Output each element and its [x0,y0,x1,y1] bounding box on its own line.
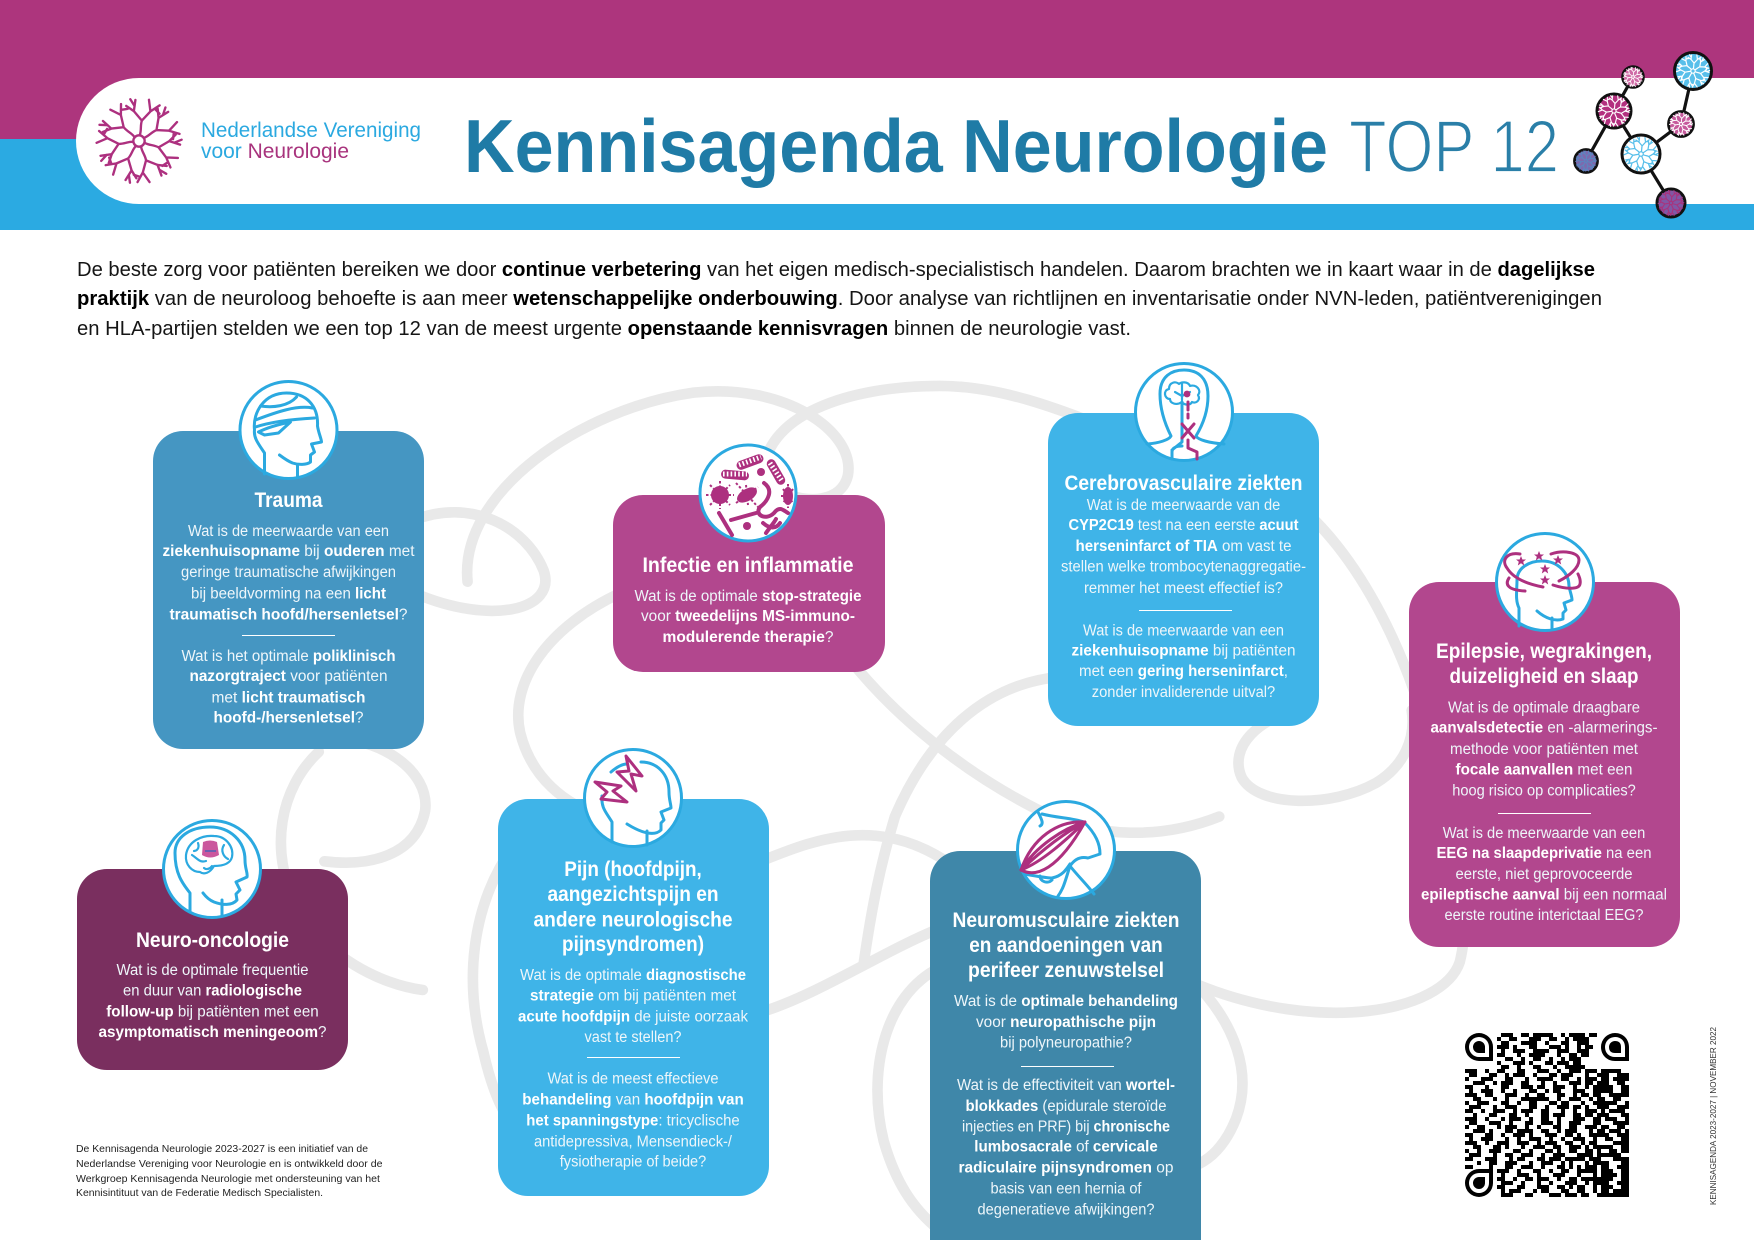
panel: Infectie en inflammatie [613,445,885,672]
question 2: radiculaire pijnsyndromen op [958,1160,1174,1176]
question 1: Wat is de meerwaarde van een [188,523,389,540]
question 2: fysiotherapie of beide? [560,1154,707,1170]
heading: pijnsyndromen) [562,933,704,956]
question 2: het spanningstype: tricyclische [526,1112,740,1130]
question 2 [522,1070,744,1170]
heading: Pijn (hoofdpijn, [564,858,702,881]
footnote text: Kennisintituut van de Federatie Medisch Specialisten. [76,1188,323,1199]
background squiggle line [281,386,1465,1230]
logo: NVN [95,97,421,186]
question 1: ziekenhuisopname bij ouderen met [162,543,415,560]
question 1: geringe traumatische afwijkingen [181,564,396,581]
header background: cyan band [0,139,1754,230]
question 2: blokkades (epidurale steroïde [966,1098,1166,1115]
question 1 [1430,700,1658,800]
title: TOP 12 [1349,105,1559,188]
question 1: vast te stellen? [584,1029,682,1046]
question 2 [182,648,396,726]
question 1: acute hoofdpijn de juiste oorzaak [518,1008,748,1026]
question: modulerende therapie? [662,629,834,646]
heading: Neuromusculaire ziekten [952,909,1180,932]
title: Kennisagenda Neurologie [464,104,1328,188]
footnote text: De Kennisagenda Neurologie 2023-2027 is een initiatief van de [76,1144,368,1155]
heading: en aandoeningen van [969,934,1163,957]
question 2 [957,1077,1175,1218]
logo text [201,119,421,163]
question 1: bij beeldvorming na een licht [191,586,386,602]
question 1: remmer het meest effectief is? [1084,580,1283,597]
heading: Cerebrovasculaire ziekten [1064,472,1302,495]
question 1: traumatisch hoofd/hersenletsel? [170,606,408,624]
question 1: bij polyneuropathie? [1000,1034,1132,1052]
question 2: basis van een hernia of [990,1180,1142,1198]
question 1 [1061,497,1306,597]
footnote text: Werkgroep Kennisagenda Neurologie met ondersteuning van het [76,1174,380,1185]
heading: Trauma: Trauma [254,489,323,512]
logo text: voor Neurologie [201,140,349,163]
icon: microbes [700,445,796,541]
question 2: Wat is de effectiviteit van wortel- [957,1077,1175,1094]
question: en duur van radiologische [123,982,302,1000]
question 2: eerste, niet geprovoceerde [1456,866,1632,883]
panel: Neuro-oncologie [77,820,348,1070]
panel: Trauma [153,382,424,749]
question 2: injecties en PRF) bij chronische [962,1118,1170,1136]
icon: shoulder muscle [1018,802,1114,898]
icon: head with brain tumour [164,820,260,918]
panel: Neuromusculaire ziekten [930,802,1201,1240]
question 2 [1421,825,1667,924]
question 1: strategie om bij patiënten met [530,988,737,1004]
logo text: Nederlandse Vereniging [201,119,421,142]
footnote text [76,1144,383,1199]
heading: Neuro-oncologie [136,929,289,952]
question 2: met licht traumatisch [212,690,366,706]
question: asymptomatisch meningeoom? [98,1024,327,1041]
footnote text: Nederlandse Vereniging voor Neurologie en is ontwikkeld door de [76,1159,383,1170]
question 1: focale aanvallen met een [1456,762,1632,778]
intro text: De beste zorg voor patiënten bereiken we door continue verbetering van het eigen medisch-specialistisch handelen. Daarom brachten we in kaart waar in de dagelijkse [77,259,1595,281]
icon: bandaged head [240,382,337,478]
question 2: lumbosacrale of cervicale [974,1138,1158,1156]
panel: Cerebrovasculaire ziekten [1048,364,1319,726]
icon: molecule network [1574,52,1712,217]
question 1: Wat is de meerwaarde van de [1087,497,1280,514]
heading: aangezichtspijn en [548,883,718,906]
heading: perifeer zenuwstelsel [968,959,1164,982]
question: Wat is de optimale frequentie [116,962,308,979]
question 2: EEG na slaapdeprivatie na een [1436,845,1652,862]
question 2: eerste routine interictaal EEG? [1444,907,1644,924]
question 2: ziekenhuisopname bij patiënten [1072,642,1296,660]
intro text: praktijk van de neuroloog behoefte is aan meer wetenschappelijke onderbouwing. Door analyse van richtlijnen en inventarisatie onder NVN-leden, patiëntverenigingen [77,288,1602,310]
icon: dizzy head with stars [1496,534,1594,630]
question 1: methode voor patiënten met [1450,741,1639,758]
question 1: Wat is de optimale draagbare [1448,700,1640,716]
question [98,962,327,1041]
question 1: CYP2C19 test na een eerste acuut [1068,517,1298,534]
question 2 [1072,622,1296,701]
question 1 [954,993,1178,1052]
icon: head with lightning bolts [584,750,682,846]
QR code [1465,1033,1629,1197]
question [634,588,862,646]
heading: Infectie en inflammatie [642,554,854,577]
intro text [77,259,1602,340]
question 2: degeneratieve afwijkingen? [978,1202,1155,1218]
heading [1436,640,1652,688]
question: voor tweedelijns MS-immuno- [641,608,855,625]
question 1: stellen welke trombocytenaggregatie- [1061,558,1306,576]
question 1 [162,523,415,624]
question 2: met een gering herseninfarct, [1079,663,1288,680]
question 1: voor neuropathische pijn [976,1014,1156,1031]
question 1: herseninfarct of TIA om vast te [1076,538,1292,555]
heading [534,858,732,956]
question 2: Wat is de meerwaarde van een [1083,622,1284,640]
panel: Pijn [498,750,769,1196]
question 1: Wat is de optimale diagnostische [520,967,746,984]
question: follow-up bij patiënten met een [106,1004,319,1020]
panel: Epilepsie, wegrakingen, duizeligheid en slaap [1409,534,1680,947]
header white pill [76,78,1754,204]
question 2: Wat is de meerwaarde van een [1443,825,1645,842]
header background: magenta band [0,0,1754,140]
heading [952,909,1180,982]
question 2: hoofd-/hersenletsel? [214,710,364,726]
heading: andere neurologische [534,908,732,932]
question 1: Wat is de optimale behandeling [954,993,1178,1010]
question 2: behandeling van hoofdpijn van [522,1092,744,1108]
icon: neuron logo [95,97,185,186]
question 2: nazorgtraject voor patiënten [190,668,388,685]
question 1: hoog risico op complicaties? [1452,782,1636,800]
question 1 [518,967,748,1046]
icon: brain with stroke pathway [1136,364,1232,460]
side note: date: KENNISAGENDA 2023-2027 | NOVEMBER 2022 [1709,1026,1718,1205]
question 2: epileptische aanval bij een normaal [1421,886,1667,904]
heading: Epilepsie, wegrakingen, [1436,640,1652,663]
question 2: antidepressiva, Mensendieck-/ [534,1134,733,1150]
question 1: aanvalsdetectie en -alarmerings- [1430,720,1658,736]
question 2: Wat is de meest effectieve [548,1070,718,1088]
question: Wat is de optimale stop-strategie [634,588,862,605]
heading: duizeligheid en slaap [1450,665,1638,688]
question 2: Wat is het optimale poliklinisch [182,648,396,665]
question 2: zonder invaliderende uitval? [1092,684,1276,701]
intro text: en HLA-partijen stelden we een top 12 van de meest urgente openstaande kennisvragen binnen de neurologie vast. [77,318,1131,340]
